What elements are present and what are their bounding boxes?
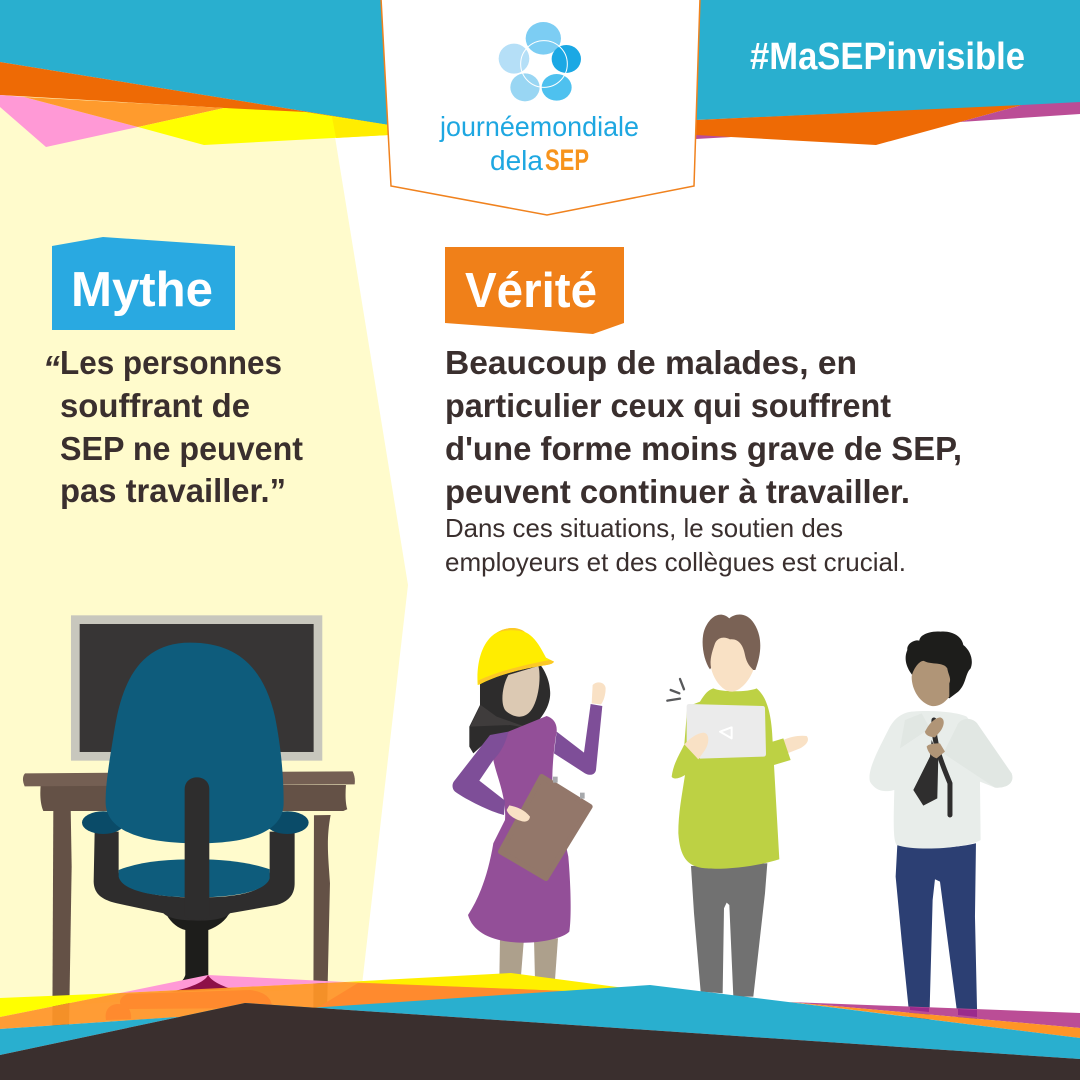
logo	[439, 22, 639, 177]
monitor	[71, 615, 322, 761]
truth statement: Beaucoup de malades, en	[445, 344, 857, 381]
figure: woman in hard hat with clipboard	[452, 628, 606, 980]
logo wordmark: journéemondiale	[439, 111, 639, 142]
logo: five petals	[499, 22, 581, 101]
top left colour banner	[0, 0, 389, 147]
figure: person with laptop	[667, 615, 808, 997]
figure: man adjusting tie	[869, 631, 1012, 1022]
myth quote	[43, 344, 303, 509]
logo: SEP	[545, 144, 589, 177]
truth statement	[445, 344, 962, 510]
chair wheels seen through the band	[106, 990, 272, 1020]
myth quote: souffrant de	[60, 387, 250, 424]
truth statement: peuvent continuer à travailler.	[445, 473, 910, 510]
label: Vérité	[445, 247, 624, 334]
truth detail text: employeurs et des collègues est crucial.	[445, 547, 906, 577]
illustration: desk, monitor and office chair	[23, 615, 355, 1030]
label: Vérité: Vérité	[465, 264, 597, 318]
panel: logo shield	[381, 0, 700, 215]
logo: dela	[490, 145, 543, 176]
myth quote: SEP ne peuvent	[60, 430, 303, 467]
chair	[82, 643, 309, 988]
panel: myth background	[0, 90, 408, 1010]
top right colour banner	[696, 0, 1080, 145]
bottom colour banner	[0, 973, 1080, 1080]
truth detail text: Dans ces situations, le soutien des	[445, 513, 843, 543]
label: Mythe: Mythe	[71, 263, 213, 317]
truth statement: particulier ceux qui souffrent	[445, 387, 891, 424]
desk	[23, 771, 355, 1030]
myth quote: pas travailler.”	[60, 472, 286, 509]
truth statement: d'une forme moins grave de SEP,	[445, 430, 962, 467]
hashtag: #MaSEPinvisible	[750, 36, 1025, 78]
truth detail text	[445, 513, 906, 577]
myth quote: “	[43, 349, 61, 386]
label: Mythe	[52, 237, 235, 330]
myth quote: Les personnes	[60, 344, 282, 381]
